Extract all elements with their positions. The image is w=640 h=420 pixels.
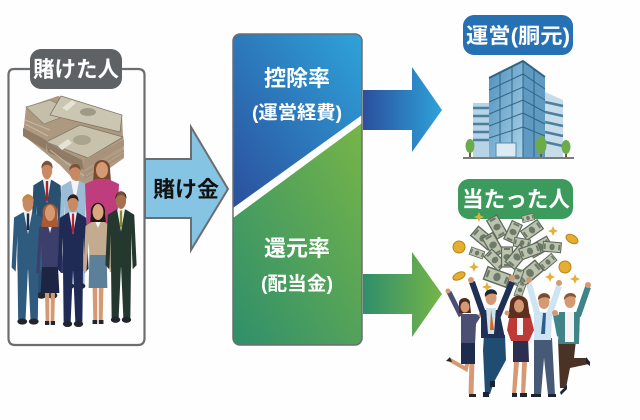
person: front right man	[105, 191, 137, 323]
person: back right	[85, 160, 119, 230]
arrow: stake: 賭け金	[153, 177, 219, 202]
illustration: group of bettors	[12, 160, 137, 327]
icon: stack of banknotes	[23, 96, 124, 188]
person: back left	[31, 161, 63, 299]
label: bettors: 賭けた人	[33, 57, 119, 82]
arrow: stake	[145, 127, 228, 250]
icons: gold coins and sparkles	[452, 212, 580, 292]
icon: office building	[463, 61, 574, 159]
segment: deduction rate: (運営経費)	[252, 102, 342, 123]
illustration: falling banknotes	[469, 213, 561, 298]
person: winner man blue shirt	[526, 277, 562, 397]
illustration: cheering winners	[446, 275, 591, 397]
panel: split rate box	[233, 34, 362, 345]
person: back center	[59, 164, 91, 289]
arrow: to winners	[363, 252, 442, 337]
segment: deduction rate: 控除率	[264, 66, 330, 91]
person: winner woman center	[504, 296, 534, 397]
person: front left woman	[36, 204, 64, 325]
person: winner woman left	[446, 288, 484, 397]
label: operator	[463, 15, 573, 55]
tree: left	[466, 139, 474, 158]
person: winner man navy	[468, 275, 515, 397]
segment: return rate: (配当金)	[261, 273, 333, 295]
tree: right	[562, 140, 570, 158]
person: front center man	[57, 194, 89, 327]
person: front right woman	[83, 203, 113, 324]
panel: bettors	[8, 49, 144, 345]
segment: return rate: 還元率	[264, 236, 330, 261]
person: winner man teal jacket	[552, 282, 591, 395]
segment: deduction rate	[233, 34, 362, 208]
segment: return rate	[233, 123, 362, 345]
label: operator: 運営(胴元)	[466, 25, 570, 48]
arrow: to operator	[363, 67, 442, 152]
label: winners: 当たった人	[462, 187, 570, 212]
label: bettors	[30, 49, 122, 89]
tree: center	[536, 136, 546, 158]
label: winners	[458, 179, 573, 219]
person: front left man	[12, 194, 44, 325]
